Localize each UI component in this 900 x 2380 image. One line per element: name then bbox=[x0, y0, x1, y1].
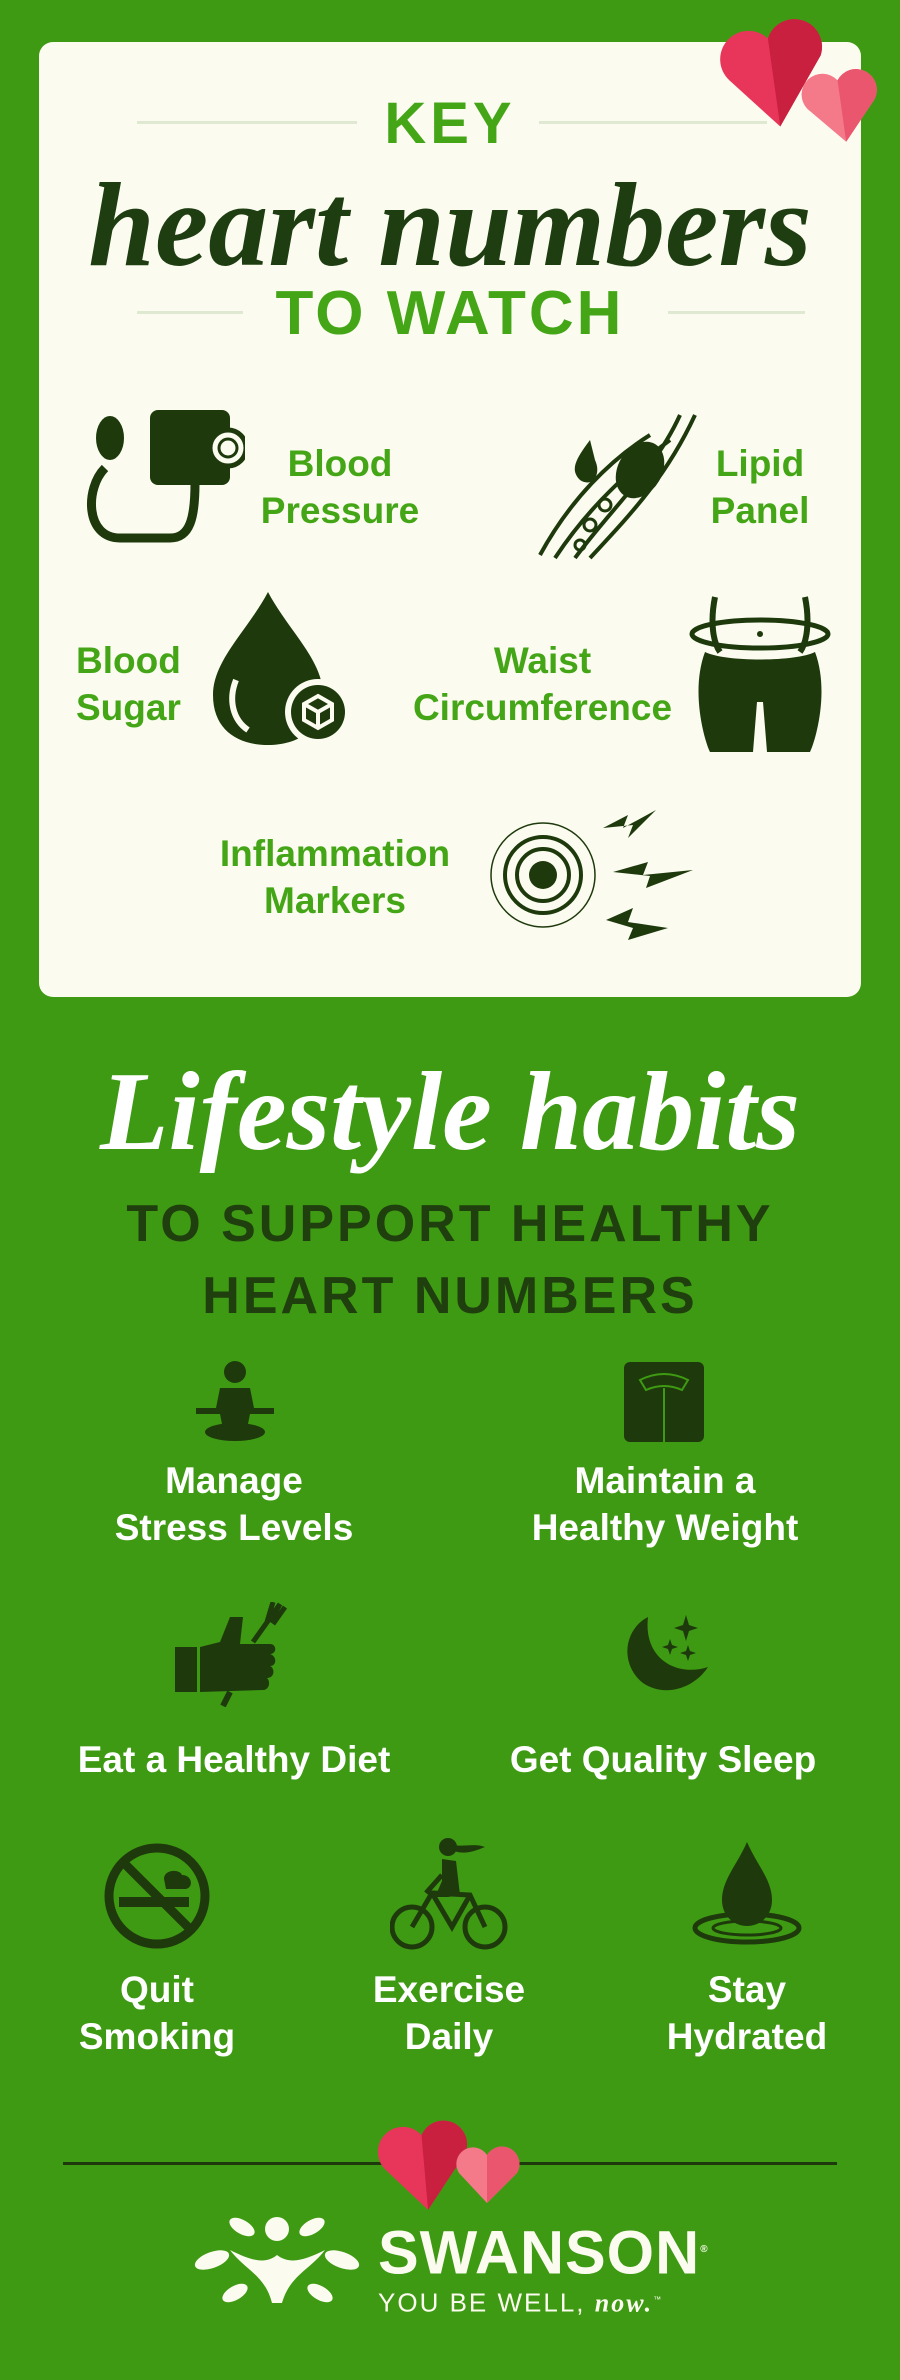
label: Waist Circumference bbox=[413, 640, 672, 728]
label: Stay Hydrated: Stay bbox=[708, 1969, 786, 2010]
label: Maintain a Healthy Weight: Healthy Weight bbox=[532, 1507, 798, 1548]
icon: no smoking bbox=[104, 1844, 210, 1948]
heading: KEY: KEY bbox=[384, 91, 516, 156]
label: Quit Smoking: Smoking bbox=[79, 2016, 235, 2057]
logo: SWANSON wordmark and tagline: SWANSON® bbox=[378, 2218, 709, 2286]
label: Manage Stress Levels: Stress Levels bbox=[115, 1507, 353, 1548]
icon: blood pressure bbox=[86, 410, 245, 542]
heading: to support healthy heart numbers: TO SUPPORT HEALTHY bbox=[126, 1195, 774, 1253]
icon: waist bbox=[690, 596, 830, 752]
label: Eat a Healthy Diet: Eat a Healthy Diet bbox=[78, 1739, 390, 1780]
label: Lipid Panel: Panel bbox=[711, 490, 809, 531]
label: Quit Smoking: Quit bbox=[120, 1969, 194, 2010]
icon: meditation bbox=[196, 1361, 274, 1441]
decorative hearts top right bbox=[720, 19, 877, 142]
heading: to support healthy heart numbers: HEART NUMBERS bbox=[202, 1267, 698, 1325]
label: Blood Pressure bbox=[261, 443, 419, 531]
label: Maintain a Healthy Weight: Maintain a bbox=[575, 1460, 755, 1501]
heading: TO WATCH: TO WATCH bbox=[276, 279, 624, 348]
label: Manage Stress Levels bbox=[115, 1460, 353, 1548]
icon: moon stars bbox=[627, 1615, 708, 1690]
label: Blood Pressure: Blood bbox=[288, 443, 392, 484]
heading: heart numbers script: heart numbers bbox=[88, 158, 812, 291]
label: Lipid Panel: Lipid bbox=[716, 443, 804, 484]
logo: swanson mark bbox=[194, 2217, 360, 2303]
icon: thumbs up fork bbox=[175, 1602, 287, 1707]
icon: blood sugar drop bbox=[213, 592, 345, 745]
label: Blood Sugar: Blood bbox=[76, 640, 181, 681]
label: Get Quality Sleep: Get Quality Sleep bbox=[510, 1739, 816, 1780]
label: Stay Hydrated: Hydrated bbox=[667, 2016, 827, 2057]
icon: lipid panel bbox=[538, 414, 697, 560]
label: Inflammation Markers: Markers bbox=[264, 880, 406, 921]
icon: cycling bbox=[390, 1838, 508, 1950]
label: Stay Hydrated bbox=[667, 1969, 827, 2057]
icon: inflammation target bbox=[490, 810, 693, 940]
label: Blood Sugar: Sugar bbox=[76, 687, 181, 728]
label: Blood Pressure: Pressure bbox=[261, 490, 419, 531]
label: Quit Smoking bbox=[79, 1969, 235, 2057]
label: Waist Circumference: Waist bbox=[494, 640, 591, 681]
logo: SWANSON wordmark and tagline: YOU BE WELL, now.™ bbox=[378, 2288, 663, 2318]
panel: key heart numbers card bbox=[39, 42, 861, 997]
label: Inflammation Markers: Inflammation bbox=[220, 833, 450, 874]
decorative hearts bottom bbox=[378, 2120, 520, 2210]
label: Exercise Daily: Exercise bbox=[373, 1969, 525, 2010]
icon: water drop bbox=[692, 1842, 802, 1944]
logo: SWANSON wordmark and tagline bbox=[378, 2218, 709, 2318]
heading: to support healthy heart numbers bbox=[126, 1195, 774, 1325]
icon: scale bbox=[624, 1362, 704, 1442]
label: Exercise Daily bbox=[373, 1969, 525, 2057]
label: Manage Stress Levels: Manage bbox=[165, 1460, 303, 1501]
label: Exercise Daily: Daily bbox=[405, 2016, 493, 2057]
label: Blood Sugar bbox=[76, 640, 181, 728]
label: Lipid Panel bbox=[711, 443, 809, 531]
label: Inflammation Markers bbox=[220, 833, 450, 921]
heading: Lifestyle habits: Lifestyle habits bbox=[100, 1050, 800, 1174]
label: Waist Circumference: Circumference bbox=[413, 687, 672, 728]
label: Maintain a Healthy Weight bbox=[532, 1460, 798, 1548]
